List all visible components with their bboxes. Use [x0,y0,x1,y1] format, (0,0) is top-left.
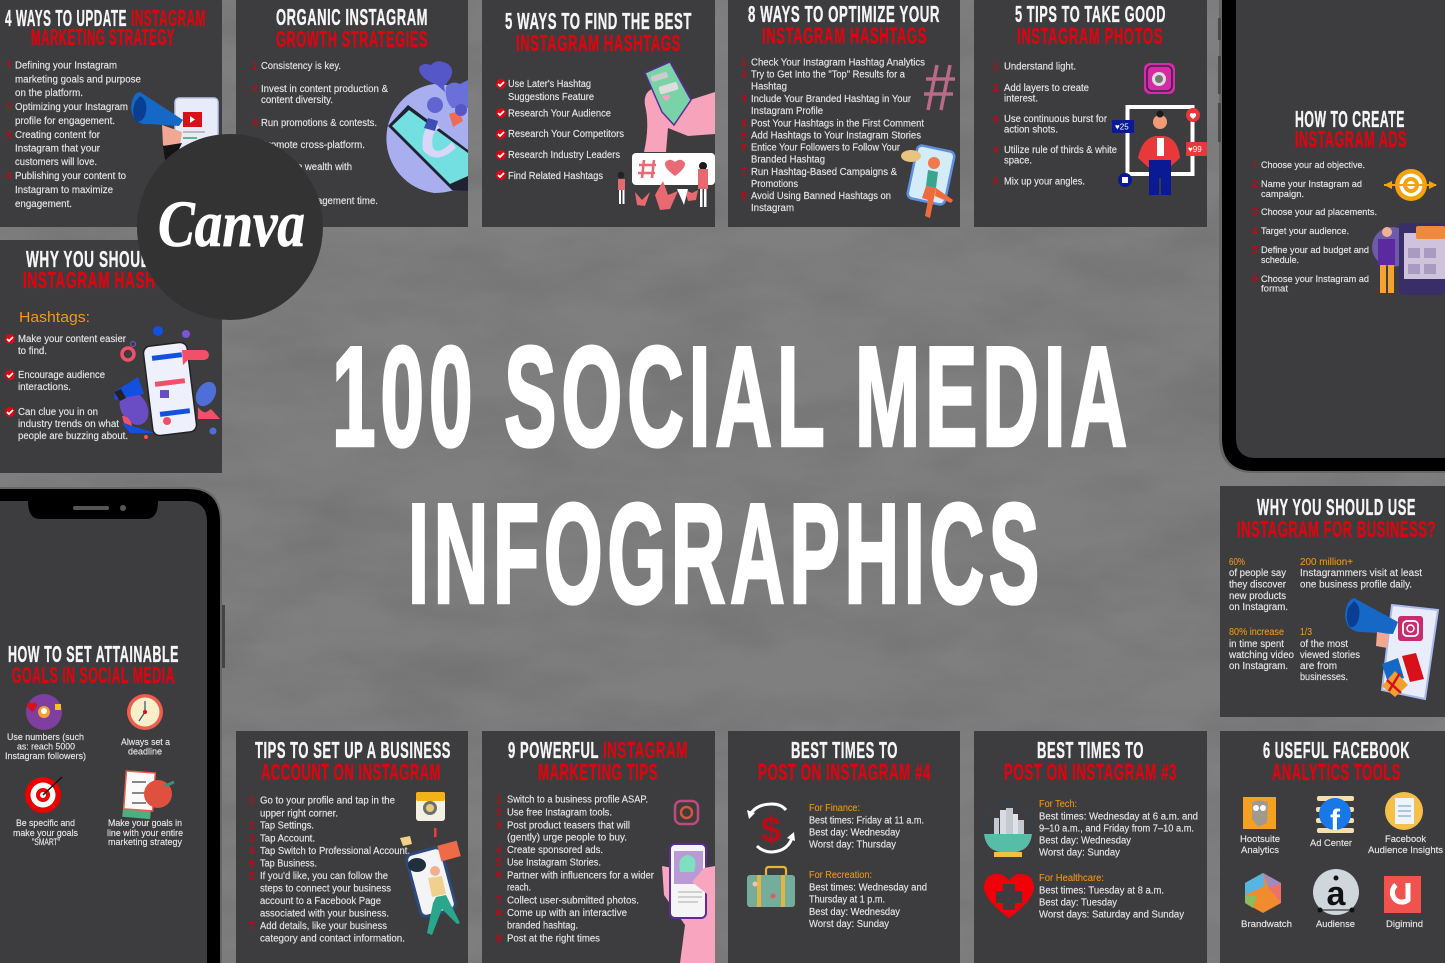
icon: person in photo frame with badges [1112,107,1207,195]
text: for finance: Best times: Friday at 11 a.m. [809,816,924,826]
numbered list: Increase engagement time. [261,196,378,207]
numbered list: 2 [1252,179,1258,190]
heading: GOALS IN SOCIAL MEDIA [12,662,175,688]
icon: bullseye target [25,777,62,813]
text: Hootsuite Analytics [1240,833,1280,855]
numbered list: 2 [249,820,255,832]
heading: INSTAGRAM HASHTAGS [23,267,195,293]
text: for recreation [809,870,927,930]
text: use numbers: as: reach 5000 [17,740,75,752]
numbered list: Understand light. [1004,62,1076,72]
checklist [5,334,128,442]
numbered list: 4 [6,171,12,182]
numbered list: Defining your Instagram [15,60,117,72]
numbered list: Use continuous burst for [1004,114,1108,125]
panel: organic Instagram growth strategies [236,0,468,227]
heading: ORGANIC INSTAGRAM [276,4,428,30]
numbered list: 3 [252,118,258,129]
numbered list: 3 [741,94,747,105]
panel: tablet device with how to create Instagram ads [1218,0,1445,473]
numbered list: account to a Facebook Page [260,896,381,907]
numbered list: 2 [496,808,502,818]
checklist: Use Later's Hashtag [508,79,591,90]
heading: INSTAGRAM PHOTOS [1017,23,1163,49]
numbered list: Branded Hashtag [751,154,825,166]
text: be specific: "SMART" [32,836,60,847]
text: for recreation: Best times: Wednesday and [809,882,927,894]
stat: 200 million: 200 million+ [1300,557,1353,568]
numbered list: Tap Settings. [260,820,314,832]
numbered list: Target your audience. [1261,225,1349,236]
stat: one third: of the most [1300,639,1348,650]
text: for finance: For Finance: [809,803,860,814]
numbered list: Post product teasers that will [507,820,630,832]
checklist: industry trends on what [18,419,119,430]
panel: 6 useful Facebook analytics tools [1220,731,1445,963]
numbered list: Instagram Profile [751,106,823,117]
numbered list: Consistency is key. [261,61,341,72]
icon: person in photo frame with badges: ♥25 [1115,122,1129,132]
numbered list [6,60,141,210]
numbered list: 6 [1252,274,1258,285]
heading [23,246,195,293]
icon: marketer with phone ads [1372,223,1445,295]
numbered list: Switch to a business profile ASAP. [507,794,648,806]
text: make your goals in line [107,817,183,847]
numbered list: Promote cross-platform. [261,140,365,151]
numbered list: If you'd like, you can follow the [260,871,388,882]
checklist: Can clue you in on [18,407,98,418]
numbered list [993,62,1117,188]
checklist [496,79,624,182]
checklist: Encourage audience [18,370,105,381]
text: for tech: Worst day: Sunday [1039,848,1120,858]
text: Digimind: Digimind [1386,918,1423,929]
panel: why you should use Instagram for business [1220,486,1445,717]
numbered list: 5 [249,858,255,870]
numbered list: Choose your ad placements. [1261,206,1377,217]
numbered list: Add layers to create [1004,83,1089,94]
checklist: Research Industry Leaders [508,150,620,161]
icon: phone with magnet and hearts [386,61,468,193]
icon: Brandwatch hexagon [1245,873,1281,913]
numbered list: Instagram to maximize [15,185,113,196]
numbered list: 1 [741,58,747,68]
numbered list: schedule. [1261,254,1299,265]
main title [332,318,1132,634]
subheading: Hashtags: Hashtags: [19,309,90,326]
numbered list: 4 [496,845,502,856]
numbered list [741,58,925,214]
text: make your goals in line: Make your goals in [108,817,182,828]
numbered list: Come up with an interactive [507,908,627,919]
heading [1295,106,1407,152]
numbered list: 5 [496,858,502,868]
numbered list: 4 [1252,226,1258,237]
icon: phone with megaphone and leaves [114,326,220,439]
heading: HOW TO SET ATTAINABLE [8,641,179,667]
panel: 4 ways to update Instagram marketing strategy [0,0,222,227]
numbered list: branded hashtag. [507,920,578,932]
numbered list: 2 [741,70,747,80]
text: Facebook Audience Insights [1368,833,1443,855]
icon: checklist and target [122,771,174,819]
numbered list: Run promotions & contests. [261,118,377,129]
stat: 60 percent: 60% [1229,557,1245,568]
numbered list: Invest in content production & [261,84,388,95]
stat: 200 million: Instagrammers visit at least [1300,568,1422,579]
numbered list [1252,159,1377,294]
heading: BEST TIMES TO [1037,737,1144,763]
icon: hand holding phone [644,62,715,152]
icon: dollar with circular arrows [747,804,795,852]
numbered list: 5 [993,176,999,188]
text: for tech: 9–10 a.m., and Friday from 7–10 a.m. [1039,824,1194,834]
numbered list: Add Hashtags to Your Instagram Stories [751,130,921,142]
numbered list: 3 [1252,207,1258,218]
stat: one third [1300,627,1360,683]
stat: 60 percent [1229,557,1288,613]
numbered list [249,796,410,944]
icon: Hootsuite owl [1243,797,1276,829]
heading: MARKETING STRATEGY [31,24,175,50]
heading [508,737,688,785]
icon: person in photo frame with badges: ♥99 [1188,145,1202,154]
numbered list: interest. [1004,94,1038,104]
text: for tech: Best times: Wednesday at 6 a.m. and [1039,812,1198,822]
numbered list: content diversity. [261,95,333,106]
numbered list: Define your ad budget and [1261,244,1369,255]
numbered list: marketing goals and purpose [15,74,141,86]
numbered list: 3 [249,834,255,844]
numbered list: Post Your Hashtags in the First Comment [751,118,924,130]
numbered list: Publishing your content to [15,171,126,182]
text: for healthcare: For Healthcare: [1039,873,1104,884]
panel: why you should use Instagram hashtags [0,240,222,473]
heading [1004,737,1177,785]
numbered list [252,61,388,207]
icon: Audiense: a [1327,875,1347,913]
text: always set a deadline: deadline [128,746,162,756]
numbered list: Add details, like your business [260,921,387,932]
numbered list: Promotions [751,179,798,190]
heading: ACCOUNT ON INSTAGRAM [261,759,441,785]
heading: 4 WAYS TO UPDATE [5,5,127,31]
text: be specific: Be specific and [16,817,75,828]
numbered list: reach. [507,882,531,894]
heading [505,8,692,56]
icon: Audiense [1313,869,1359,915]
stat: 60 percent: they discover [1229,580,1287,590]
numbered list: action shots. [1004,124,1058,136]
numbered list: 1 [1252,160,1258,171]
numbered list: Name your Instagram ad [1261,178,1362,189]
heading: WHY YOU SHOULD USE [26,246,194,272]
panel: 5 tips to take good Instagram photos [974,0,1207,227]
numbered list: 2 [993,83,999,94]
text: Facebook Audience Insights: Audience Insights [1368,844,1443,855]
icon: purple follower network [26,694,62,730]
numbered list: Use free Instagram tools. [507,808,612,818]
numbered list: Choose your Instagram ad [1261,273,1369,284]
numbered list: 7 [249,921,255,932]
text: use numbers [5,731,86,761]
stat: 200 million: one business profile daily. [1300,580,1412,590]
text: Facebook Audience Insights: Facebook [1385,833,1426,844]
numbered list: 4 [993,145,999,156]
icon: megaphone, phone and shopping bags [1345,598,1438,699]
phone notch [28,501,158,519]
text: use numbers: Instagram followers) [5,750,86,761]
stat: 60 percent: new products [1229,591,1286,602]
text: be specific [13,817,78,847]
heading [1015,1,1166,49]
numbered list: 1 [6,60,12,71]
numbered list: campaign. [1261,188,1304,199]
numbered list: 8 [741,191,747,202]
heading: INSTAGRAM HASHTAGS [762,22,927,48]
heading: POST ON INSTAGRAM #4 [758,759,931,785]
numbered list: Include Your Branded Hashtag in Your [751,94,912,105]
icon: clock [127,694,163,730]
numbered list: customers will love. [15,157,97,168]
heading [255,737,451,785]
icon: Facebook Audience Insights [1385,792,1423,830]
heading [1237,494,1436,542]
heading: INSTAGRAM [603,737,688,763]
text: always set a deadline: Always set a [121,736,171,747]
numbered list: Choose your ad objective. [1261,159,1365,170]
heading: POST ON INSTAGRAM #3 [1004,759,1177,785]
numbered list: space. [1004,156,1032,166]
heading: 5 WAYS TO FIND THE BEST [505,8,692,34]
text: use numbers: Use numbers (such [7,731,84,742]
icon: camera app [1144,63,1175,94]
numbered list: Tap Account. [260,834,315,844]
numbered list: Create sponsored ads. [507,845,603,856]
numbered list: format [1261,282,1288,294]
heading: BEST TIMES TO [791,737,898,763]
checklist: Find Related Hashtags [508,171,603,182]
numbered list: 3 [6,130,12,141]
numbered list: Run Hashtag-Based Campaigns & [751,167,897,178]
numbered list: 2 [6,102,12,113]
text: be specific: make your goals [13,827,78,838]
numbered list: Optimizing your Instagram [15,102,128,113]
text: for healthcare [1039,873,1184,920]
heading: 9 POWERFUL [508,737,599,763]
icon: retro camera [416,792,445,821]
numbered list: Check Your Instagram Hashtag Analytics [751,58,925,68]
heading [5,5,206,50]
icon: Instagram logo [675,801,698,824]
stat: 60 percent: of people say [1229,568,1286,579]
text: for finance: Best day: Wednesday [809,828,900,838]
numbered list: Creating content for [15,130,101,141]
icon: Ad Center Facebook: f [1330,804,1341,837]
heading: GROWTH STRATEGIES [276,26,428,52]
numbered list: influencers. [261,173,311,184]
stat: 80 percent increase: 80% increase [1229,627,1284,638]
icon: hashtag and heart billboard with people [618,153,715,210]
heading [758,737,931,785]
panel: 8 ways to optimize your Instagram hashtags [728,0,960,227]
numbered list: 7 [496,896,502,906]
icon: orange target with arrow [1384,169,1437,201]
stat: 80 percent increase: on Instagram. [1229,661,1288,672]
numbered list: 3 [496,820,502,832]
numbered list: 1 [249,796,255,806]
numbered list: 8 [496,908,502,919]
numbered list: 6 [741,142,747,154]
stat: 200 million [1300,557,1422,590]
numbered list: 5 [741,130,747,142]
stat: one third: 1/3 [1300,627,1312,638]
numbered list: upper right corner. [260,808,338,820]
icon: Digimind [1384,876,1421,913]
numbered list: Go to your profile and tap in the [260,796,395,806]
numbered list: Collect user-submitted photos. [507,896,639,906]
text: for finance: Worst day: Thursday [809,840,896,850]
numbered list: 4 [249,846,255,857]
numbered list: 7 [741,167,747,178]
text: for finance [809,803,924,850]
icon: pink hashtag [924,65,955,110]
text: make your goals in line: line with your entire [107,827,183,838]
stat: one third: businesses. [1300,672,1348,683]
heading [276,4,428,52]
numbered list: Partner with influencers for a wider [507,870,655,882]
numbered list: 5 [1252,245,1258,256]
text: for tech: Best day: Wednesday [1039,836,1131,846]
numbered list: Avoid Using Banned Hashtags on [751,191,891,202]
checklist: to find. [18,346,47,357]
numbered list: category and contact information. [260,934,405,944]
text: Hootsuite Analytics: Analytics [1241,844,1279,855]
numbered list: steps to connect your business [260,884,391,894]
numbered list: associated with your business. [260,908,389,920]
checklist: people are buzzing about. [18,431,128,442]
checklist: Suggestions Feature [508,92,594,103]
text: for healthcare: Best day: Tuesday [1039,898,1117,908]
numbered list: 4 [741,118,747,130]
icon: woman jumping out of phone [901,145,955,218]
text: for tech: For Tech: [1039,799,1077,810]
heading [1263,737,1410,785]
icon: suitcase [747,867,795,907]
text: always set a deadline [121,736,171,756]
stat: one third: viewed stories [1300,650,1360,661]
numbered list: on the platform. [15,88,83,99]
numbered list: Utilize rule of thirds & white [1004,145,1117,156]
text: make your goals in line: marketing strategy [108,836,182,847]
text: Audiense: Audiense [1316,918,1355,929]
numbered list: 1 [993,62,999,72]
text: for recreation: Thursday at 1 p.m. [809,894,885,906]
stat: 80 percent increase: watching video [1228,650,1294,661]
numbered list: engagement. [15,199,72,210]
text: for tech [1039,799,1198,858]
numbered list: 2 [252,84,258,95]
numbered list: 6 [249,871,255,882]
numbered list: Tap Switch to Professional Account. [260,846,410,857]
panel: 9 powerful Instagram marketing tips [482,731,715,963]
text: Ad Center: Ad Center [1310,837,1352,848]
numbered list: profile for engagement. [15,116,115,127]
text: for recreation: For Recreation: [809,870,872,881]
heading: INSTAGRAM HASHTAGS [516,30,681,56]
panel: best times to post on Instagram #3 [974,731,1207,963]
numbered list: Entice Your Followers to Follow Your [751,142,901,154]
icon: red heart with cross [984,874,1034,918]
text: for recreation: Worst day: Sunday [809,919,889,930]
heading: 8 WAYS TO OPTIMIZE YOUR [748,1,940,27]
icon: city in globe [983,800,1033,857]
icon: dollar with circular arrows: $ [761,809,781,850]
stat: 80 percent increase: in time spent [1229,639,1284,650]
stat: 60 percent: on Instagram. [1229,602,1288,613]
checklist: Research Your Audience [508,108,611,120]
heading: MARKETING TIPS [538,759,658,785]
stat: 80 percent increase [1228,627,1294,672]
icon: megaphone and phone [131,92,218,162]
numbered list: 3 [993,114,999,125]
checklist: Make your content easier [18,334,127,345]
numbered list: 1 [496,794,502,806]
panel: tips to set up a business account on Instagram [236,731,468,963]
text: for healthcare: Worst days: Saturday and Sunday [1039,910,1184,920]
numbered list: Instagram that your [15,144,101,154]
numbered list: Mix up your angles. [1004,176,1085,188]
numbered list: Instagram [751,203,794,214]
heading: INSTAGRAM [131,5,206,31]
numbered list: Post at the right times [507,934,600,944]
icon: hand holding phone [662,844,715,963]
numbered list: Tap Business. [260,858,317,870]
numbered list: Use Instagram Stories. [507,858,601,868]
heading: 5 TIPS TO TAKE GOOD [1015,1,1166,27]
text: Brandwatch: Brandwatch [1241,918,1292,929]
icon: woman with gift leaving phone [400,828,461,935]
panel: best times to post on Instagram #4 [728,731,960,963]
numbered list: Share the wealth with [261,162,352,173]
text: Hootsuite Analytics: Hootsuite [1240,833,1280,844]
panel: phone with how to set attainable goals [0,487,225,963]
heading: TIPS TO SET UP A BUSINESS [255,737,451,763]
numbered list: Hashtag [751,82,787,92]
Canva badge [137,134,323,320]
text: for recreation: Best day: Wednesday [809,907,900,918]
numbered list: (gently) urge people to buy. [507,832,627,844]
stat: one third: are from [1300,661,1337,672]
checklist: interactions. [18,382,71,393]
heading [748,1,940,48]
numbered list: 6 [496,870,502,882]
icon: Ad Center Facebook [1316,796,1354,837]
numbered list: 1 [252,61,258,72]
checklist: Research Your Competitors [508,129,624,140]
numbered list: Try to Get Into the "Top" Results for a [751,70,905,80]
Canva badge: Canva [158,188,305,261]
numbered list [496,794,655,944]
heading [8,641,179,688]
numbered list: 9 [496,934,502,944]
panel: 5 ways to find the best Instagram hashtags [482,0,715,227]
text: for healthcare: Best times: Tuesday at 8 a.m. [1039,886,1164,896]
